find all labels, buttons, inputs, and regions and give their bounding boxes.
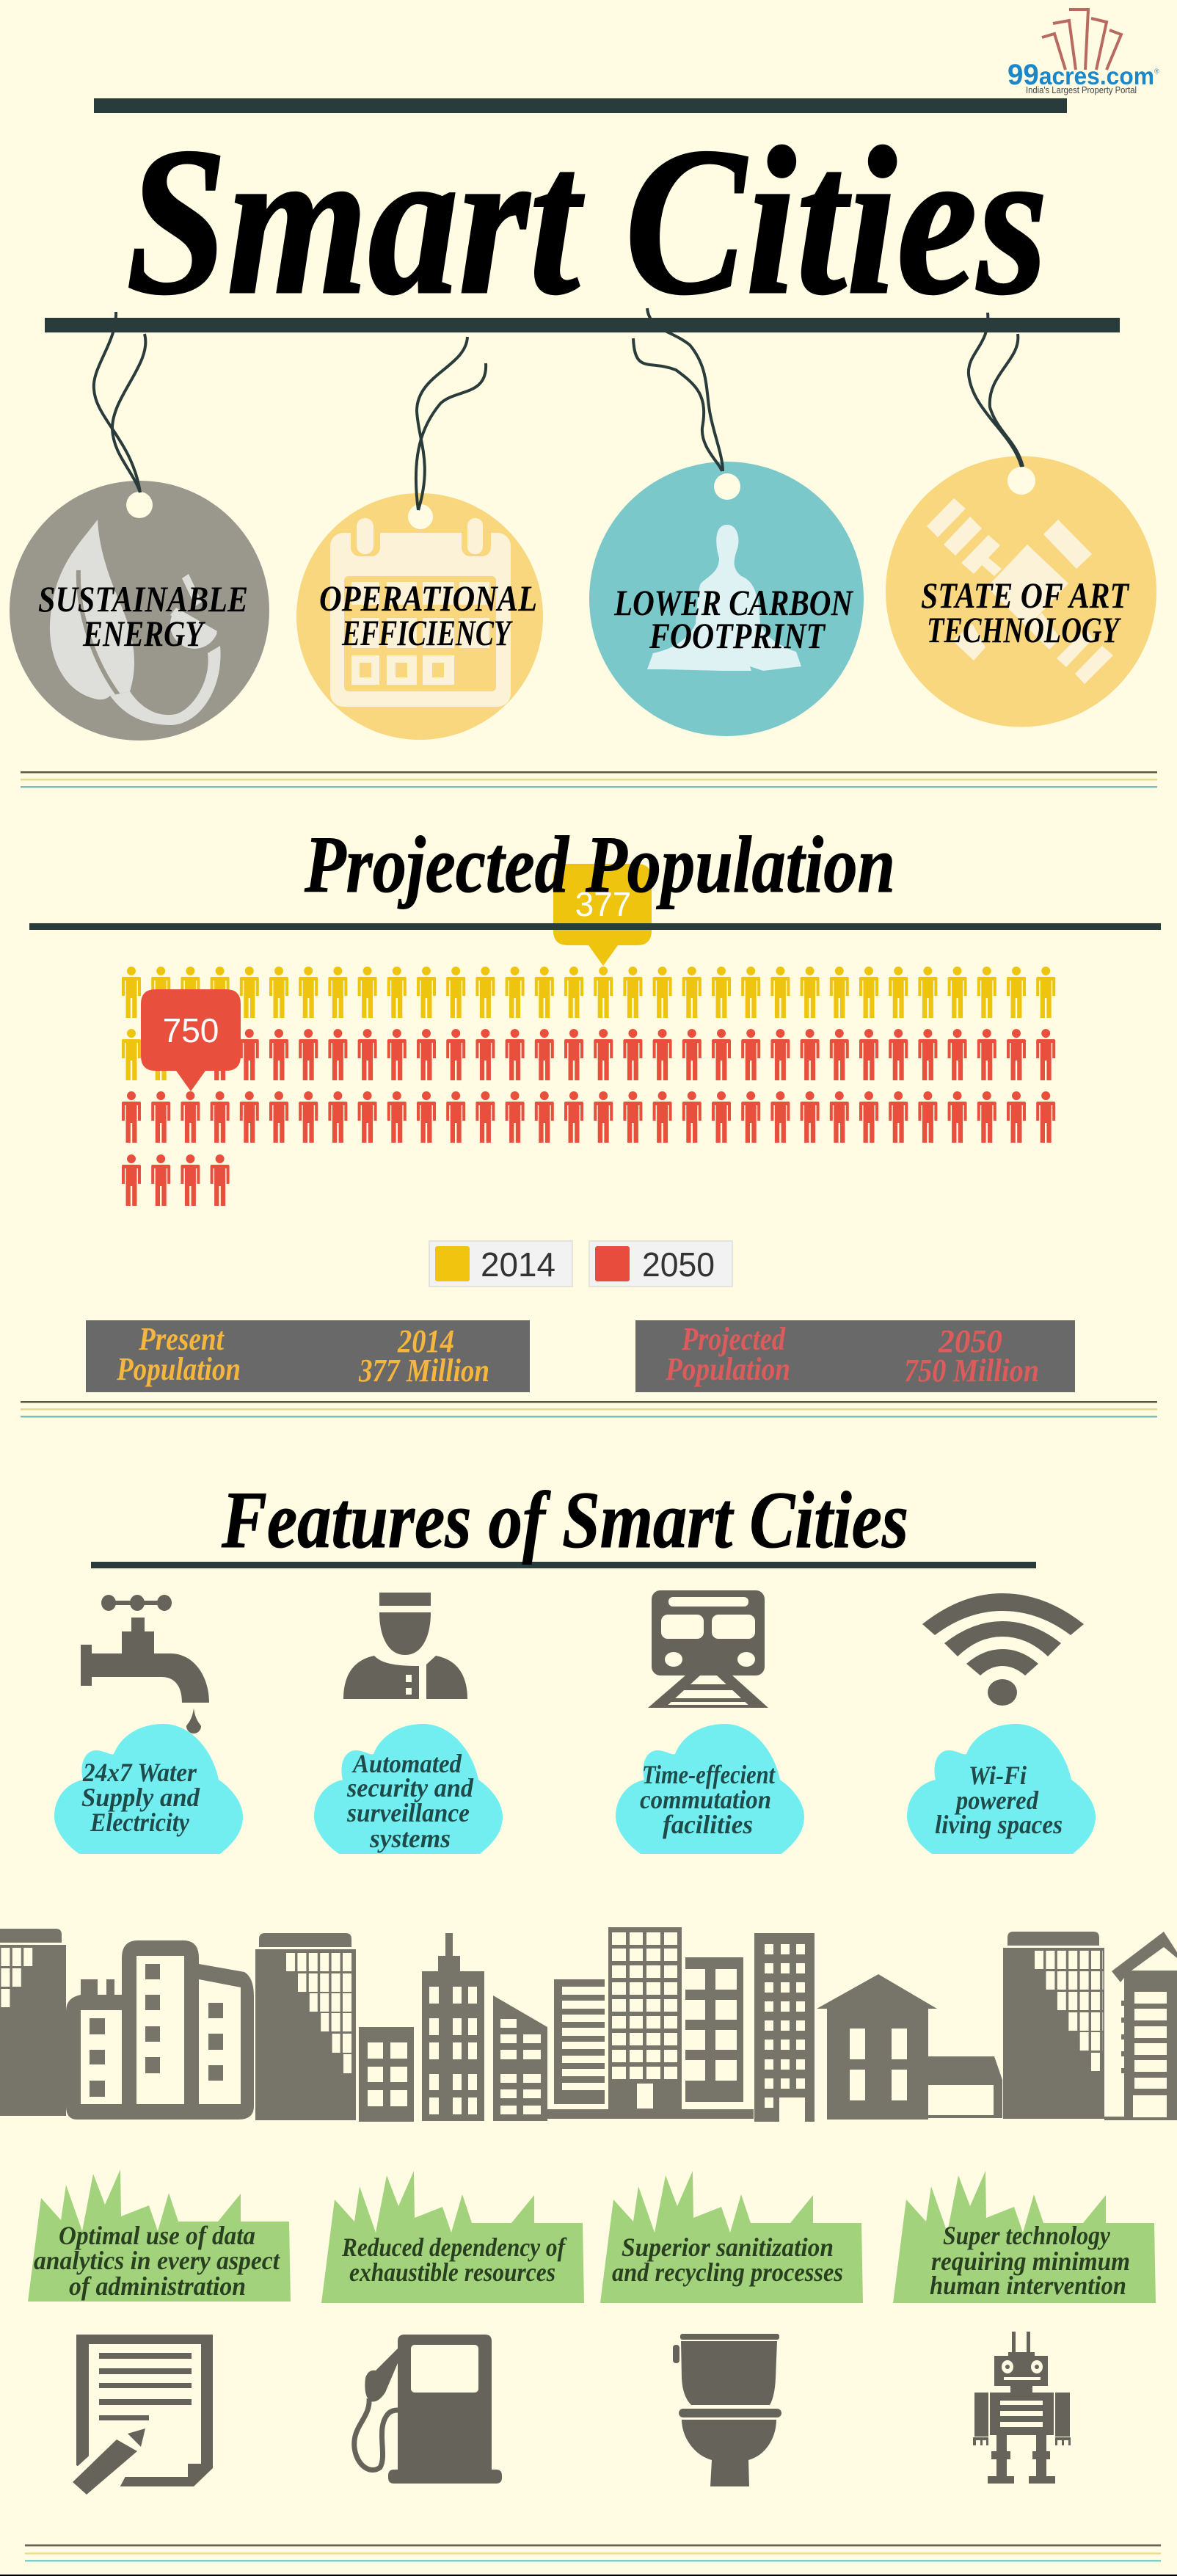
building a [0, 1929, 66, 2116]
icon: leaf and plug [50, 520, 221, 725]
panel: present population: 2014 [397, 1323, 454, 1359]
icon: fuel pump [354, 2335, 502, 2484]
hanging bar [45, 318, 1120, 332]
cloud: security: systems [369, 1824, 451, 1853]
cloud: security: Automated [351, 1749, 462, 1778]
cloud: water [54, 1724, 243, 1854]
grass panel: data analytics: of administration [69, 2271, 246, 2301]
tag label: ENERGY [82, 613, 206, 654]
legend: 2014 [429, 1241, 572, 1287]
panel: projected population: Population [665, 1351, 790, 1387]
tag label: STATE OF ART [921, 575, 1130, 616]
tag: state of art technology [886, 456, 1156, 727]
tag label [38, 578, 248, 654]
house [817, 1974, 1002, 2120]
grass panel: sanitization [600, 2171, 863, 2303]
icon: security guard [343, 1593, 467, 1699]
tag label [319, 578, 537, 653]
heading: projected population: Projected Population [304, 820, 895, 909]
icon: meditating person [647, 525, 801, 671]
building g [493, 1995, 547, 2121]
building e [359, 2027, 414, 2122]
cloud: wifi: Wi-Fi [969, 1761, 1027, 1790]
grass panel: technology: human intervention [930, 2271, 1126, 2300]
tag label: OPERATIONAL [319, 578, 537, 619]
tag: operational efficiency [296, 493, 543, 740]
tag label: TECHNOLOGY [927, 609, 1121, 650]
top title bar [94, 98, 1067, 113]
icon: wifi [922, 1593, 1084, 1706]
cloud: water: Electricity [90, 1808, 190, 1837]
cloud: commute: commutation [640, 1785, 771, 1814]
icon: toilet [673, 2334, 781, 2486]
grass panel: resources: exhaustible resources [349, 2257, 555, 2287]
grass panel: technology: requiring minimum [931, 2246, 1130, 2276]
tag label [613, 582, 854, 656]
divider stripes 2 [21, 1401, 1157, 1418]
grass panel: sanitization: and recycling processes [612, 2257, 843, 2287]
logo: 99acres: ® [1154, 68, 1159, 75]
panel: projected population: 2050 [938, 1323, 1002, 1359]
grass panel: resources: Reduced dependency of [341, 2233, 567, 2262]
cloud: wifi: living spaces [935, 1810, 1063, 1839]
grass panel: data analytics [28, 2169, 291, 2302]
building c [255, 1933, 356, 2120]
tag: sustainable energy [10, 481, 269, 741]
cloud: security: surveillance [346, 1798, 470, 1827]
legend: 2050: 2050 [642, 1245, 715, 1284]
building h [547, 1979, 754, 2119]
panel: present population [86, 1320, 530, 1392]
grass panel: sanitization: Superior sanitization [622, 2233, 834, 2262]
tag label: SUSTAINABLE [38, 578, 248, 619]
cloud: water: 24x7 Water [82, 1758, 197, 1787]
callout: 377 [553, 864, 652, 966]
panel: projected population [635, 1320, 1075, 1392]
cloud: security [314, 1724, 503, 1854]
callout: 750: 750 [163, 1011, 219, 1049]
legend: 2014: 2014 [481, 1245, 555, 1284]
population bar [29, 923, 1161, 930]
legend: 2050 [589, 1241, 732, 1287]
tag label [921, 575, 1130, 650]
cloud: security: security and [346, 1773, 474, 1802]
building j [685, 1957, 743, 2102]
logo: 99acres [1007, 10, 1159, 95]
grass panel: technology [893, 2171, 1156, 2303]
cloud: water: Supply and [81, 1783, 200, 1812]
building f [422, 1933, 484, 2121]
icon: connector plugs [927, 498, 1113, 684]
tag label: EFFICIENCY [341, 612, 513, 653]
panel: projected population: 750 Million [904, 1353, 1039, 1389]
logo: 99acres: 99acres.com [1007, 59, 1154, 91]
panel: present population: Population [116, 1351, 241, 1387]
callout: 377: 377 [575, 885, 631, 923]
panel: present population: 377 Million [358, 1353, 489, 1389]
building cluster [66, 1940, 254, 2120]
tag label: FOOTPRINT [649, 615, 826, 656]
skyline [0, 1927, 1177, 2122]
panel: present population: Present [138, 1321, 225, 1357]
cloud: commute [616, 1724, 804, 1854]
building i [608, 1927, 682, 2114]
cloud: commute: facilities [663, 1810, 753, 1839]
cloud: wifi: powered [954, 1786, 1039, 1815]
divider stripes 3 [25, 2544, 1161, 2561]
icon: water tap [81, 1595, 209, 1733]
icon: calendar [330, 514, 511, 707]
cloud: commute: Time-effecient [642, 1760, 776, 1789]
building k [754, 1933, 815, 2122]
building m [1104, 1932, 1177, 2120]
title: Smart Cities [126, 104, 1048, 338]
grass panel: technology: Super technology [943, 2221, 1111, 2250]
icon: robot [973, 2332, 1071, 2484]
icon: train [648, 1590, 768, 1708]
divider stripes 1 [21, 771, 1157, 788]
cloud: wifi [907, 1724, 1096, 1854]
pictogram chart: population [122, 967, 1055, 1206]
logo: 99acres: India's Largest Property Portal [1026, 85, 1137, 95]
grass panel: data analytics: analytics in every aspect [34, 2246, 280, 2275]
building d [1003, 1932, 1104, 2119]
tag label: LOWER CARBON [613, 582, 854, 623]
panel: projected population: Projected [681, 1321, 786, 1357]
tag strings [94, 308, 1023, 510]
callout: 750 [141, 989, 241, 1091]
tag: lower carbon footprint [589, 462, 864, 736]
icon: document and pencil [70, 2335, 213, 2499]
grass panel: data analytics: Optimal use of data [59, 2221, 255, 2250]
grass panel: resources [321, 2171, 584, 2303]
bottom edge [0, 2575, 1177, 2576]
features bar [91, 1562, 1036, 1568]
heading: features of smart cities: Features of Smart Cities [221, 1475, 908, 1565]
